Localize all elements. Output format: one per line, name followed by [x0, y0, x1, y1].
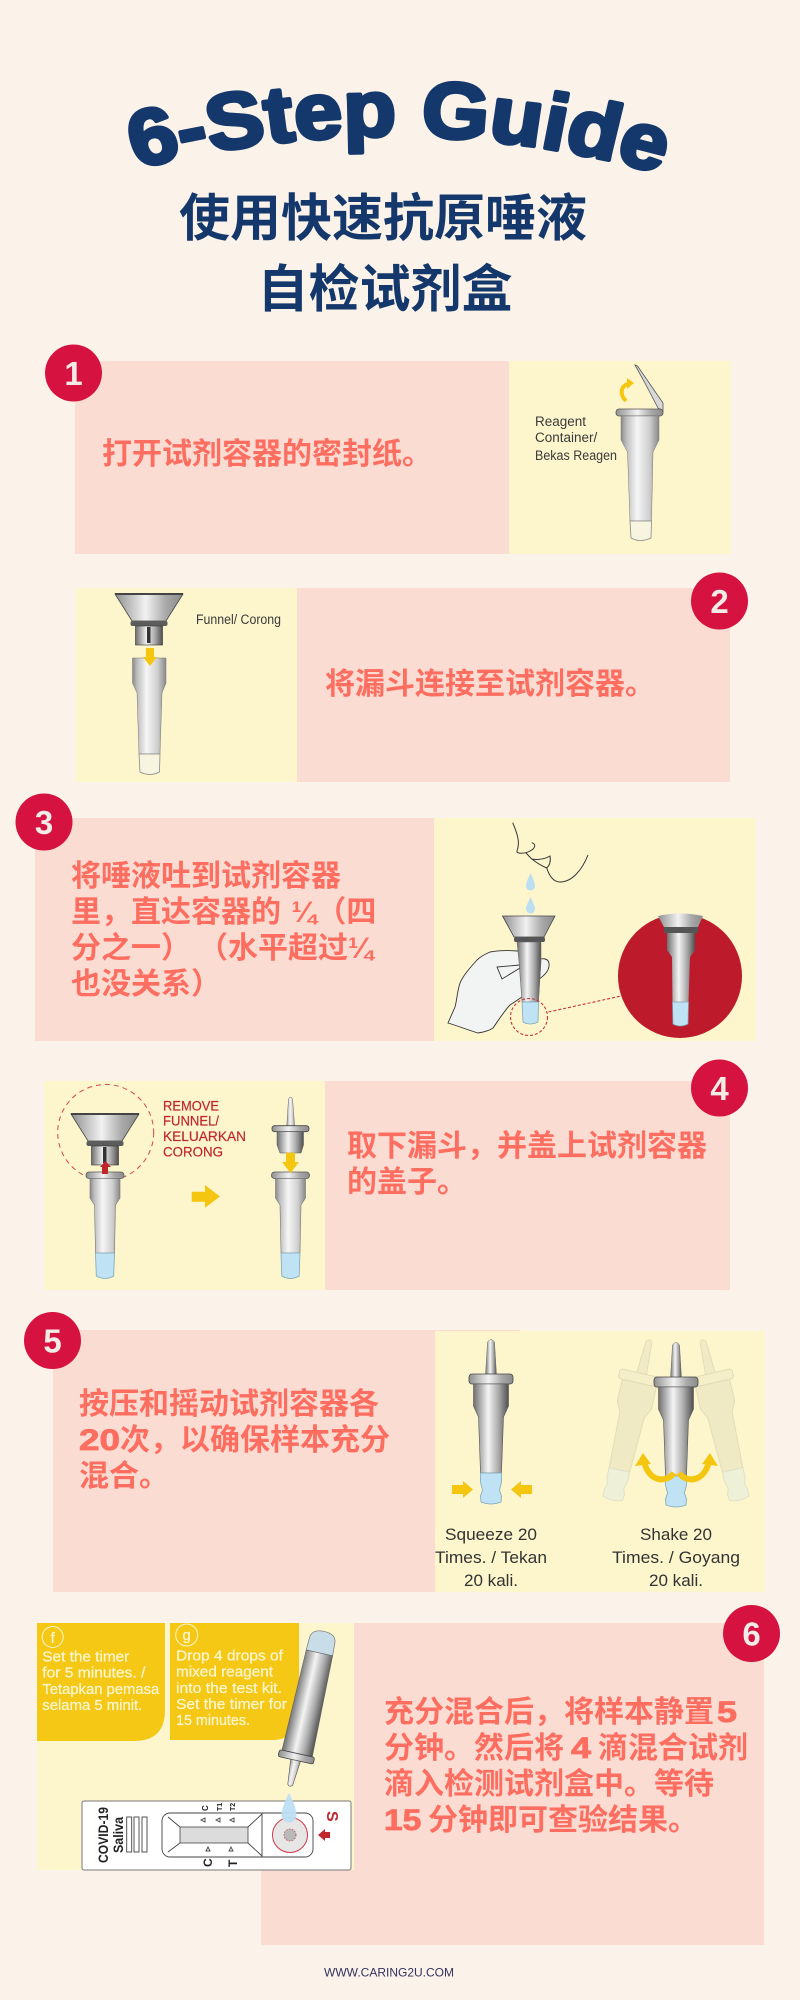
icon: test kit cassette: C [201, 1858, 215, 1867]
badge: step 5 [24, 1312, 81, 1369]
heading: Chinese subtitle: 使用快速抗原唾液 [179, 190, 587, 247]
arrow: right [192, 1185, 220, 1208]
panel: step 3 [35, 818, 756, 1041]
badge: step 3 [16, 794, 72, 850]
callout: step f timer: Set the timer [42, 1649, 129, 1666]
caption: squeeze: 20 kali. [464, 1571, 518, 1590]
label: reagent container: Container/ [535, 430, 598, 445]
step 6 instruction text: 分钟即可查验结果。 [428, 1804, 698, 1837]
badge: step 6: 6 [742, 1616, 761, 1652]
icon: cap onto tube [272, 1097, 310, 1278]
badge: step 5: 5 [43, 1322, 62, 1360]
step 4 instruction text: 的盖子。 [347, 1166, 467, 1199]
label: remove funnel: CORONG [163, 1144, 223, 1160]
badge: step 2: 2 [710, 583, 729, 620]
step 6 instruction text: 滴混合试剂 [598, 1732, 748, 1765]
icon: squeeze tube [452, 1340, 532, 1504]
step 5 instruction text: 混合。 [79, 1460, 169, 1493]
title: 6-Step Guide arched: 6-Step Guide [128, 80, 668, 172]
icon: dropper tube [272, 1628, 342, 1790]
label: funnel: Funnel/ Corong [196, 612, 281, 627]
step 6 instruction text [384, 1696, 748, 1837]
badge: step 1: 1 [64, 355, 83, 392]
panel: step 2 [76, 588, 730, 782]
step 6 instruction text: 5 [717, 1696, 737, 1729]
callout: magnified tube in red circle [618, 914, 742, 1038]
icon: reagent container with open lid [616, 365, 663, 540]
panel: step 1 [75, 361, 731, 554]
label: remove funnel: REMOVE [163, 1098, 219, 1114]
callout: step f timer: Tetapkan pemasa [42, 1681, 160, 1698]
step 6 instruction text: 分钟。然后将 [384, 1732, 564, 1765]
callout: step f timer: selama 5 minit. [42, 1697, 142, 1714]
step 6 instruction text: 15 [384, 1803, 421, 1837]
step 3 instruction text [71, 860, 376, 1001]
badge: step 1 [45, 344, 102, 402]
caption: shake: Shake 20 [640, 1525, 712, 1544]
icon: test kit cassette: S [323, 1811, 340, 1822]
icon: test kit cassette: COVID-19 [95, 1807, 111, 1863]
callout: step f timer: for 5 minutes. / [42, 1665, 146, 1682]
step 3 instruction text: 里，直达容器的 ¼（四 [71, 896, 376, 929]
step 3 instruction text: 将唾液吐到试剂容器 [71, 860, 341, 893]
footer: website: WWW.CARING2U.COM [324, 1966, 454, 1980]
step 4 instruction text [347, 1130, 707, 1199]
icon: funnel above tube [115, 593, 183, 774]
step 1 instruction text: 打开试剂容器的密封纸。 [102, 438, 432, 471]
label: reagent container: Reagent [535, 414, 586, 429]
icon: test kit cassette: T1 [217, 1803, 224, 1811]
icon: funnel and tube held [502, 916, 555, 1024]
panel: step 6 [37, 1623, 764, 1945]
badge: step 3: 3 [35, 804, 53, 841]
callout: step f timer [37, 1623, 165, 1741]
callout: step g drops [170, 1623, 299, 1740]
icon: shake tube [591, 1335, 761, 1507]
step 5 instruction text: 按压和摇动试剂容器各 [79, 1388, 379, 1421]
heading: Chinese subtitle: 自检试剂盒 [257, 261, 513, 318]
callout: step f timer: f [51, 1630, 56, 1647]
callout: step g drops: g [183, 1627, 191, 1644]
step 6 instruction text: 4 [571, 1732, 592, 1765]
step 5 instruction text [79, 1388, 390, 1493]
callout: step g drops: Drop 4 drops of [176, 1648, 284, 1665]
step 6 instruction text: 充分混合后，将样本静置 [384, 1696, 714, 1729]
icon: test kit cassette: C [201, 1805, 210, 1811]
icon: hand [448, 951, 549, 1033]
icon: saliva drops [526, 873, 535, 914]
step 6 instruction text: 滴入检测试剂盒中。等待 [384, 1768, 714, 1801]
step 3 instruction text: （水平超过¼ [198, 932, 376, 965]
step 2 instruction text: 将漏斗连接至试剂容器。 [325, 668, 655, 701]
caption: squeeze [435, 1525, 547, 1590]
callout: step g drops: mixed reagent [176, 1664, 274, 1681]
callout: step g drops: into the test kit. [176, 1680, 282, 1697]
label: remove funnel: FUNNEL/ [163, 1113, 219, 1129]
caption: squeeze: Times. / Tekan [435, 1548, 547, 1567]
callout: step g drops: 15 minutes. [176, 1712, 250, 1729]
label: reagent container [535, 414, 617, 463]
icon: test kit cassette: T [226, 1859, 240, 1867]
badge: step 4: 4 [710, 1070, 729, 1107]
step 3 instruction text: 也没关系） [71, 968, 221, 1001]
badge: step 2 [691, 572, 748, 630]
icon: test kit cassette: Saliva [110, 1817, 126, 1853]
badge: step 4 [691, 1060, 748, 1116]
caption: shake: 20 kali. [649, 1571, 703, 1590]
heading: Chinese subtitle [179, 190, 587, 318]
label: reagent container: Bekas Reagen [535, 448, 617, 463]
step 5 instruction text: 次，以确保样本充分 [120, 1424, 390, 1457]
icon: remove funnel [58, 1084, 154, 1278]
label: remove funnel: KELUARKAN [163, 1128, 246, 1144]
panel: step 5 [53, 1330, 765, 1592]
icon: face spitting [513, 823, 588, 882]
callout: step g drops: Set the timer for [176, 1696, 287, 1713]
step 4 instruction text: 取下漏斗，并盖上试剂容器 [347, 1130, 707, 1163]
caption: squeeze: Squeeze 20 [445, 1525, 537, 1544]
step 5 instruction text: 20 [79, 1424, 120, 1457]
panel: step 4 [44, 1081, 730, 1290]
caption: shake [612, 1525, 740, 1590]
badge: step 6 [723, 1605, 780, 1662]
label: remove funnel [163, 1098, 246, 1160]
icon: test kit cassette [82, 1793, 351, 1870]
caption: shake: Times. / Goyang [612, 1548, 740, 1567]
callout: dashed ring and dotted leader [510, 996, 621, 1036]
step 3 instruction text: 分之一） [71, 932, 191, 965]
icon: test kit cassette: T2 [230, 1803, 237, 1811]
